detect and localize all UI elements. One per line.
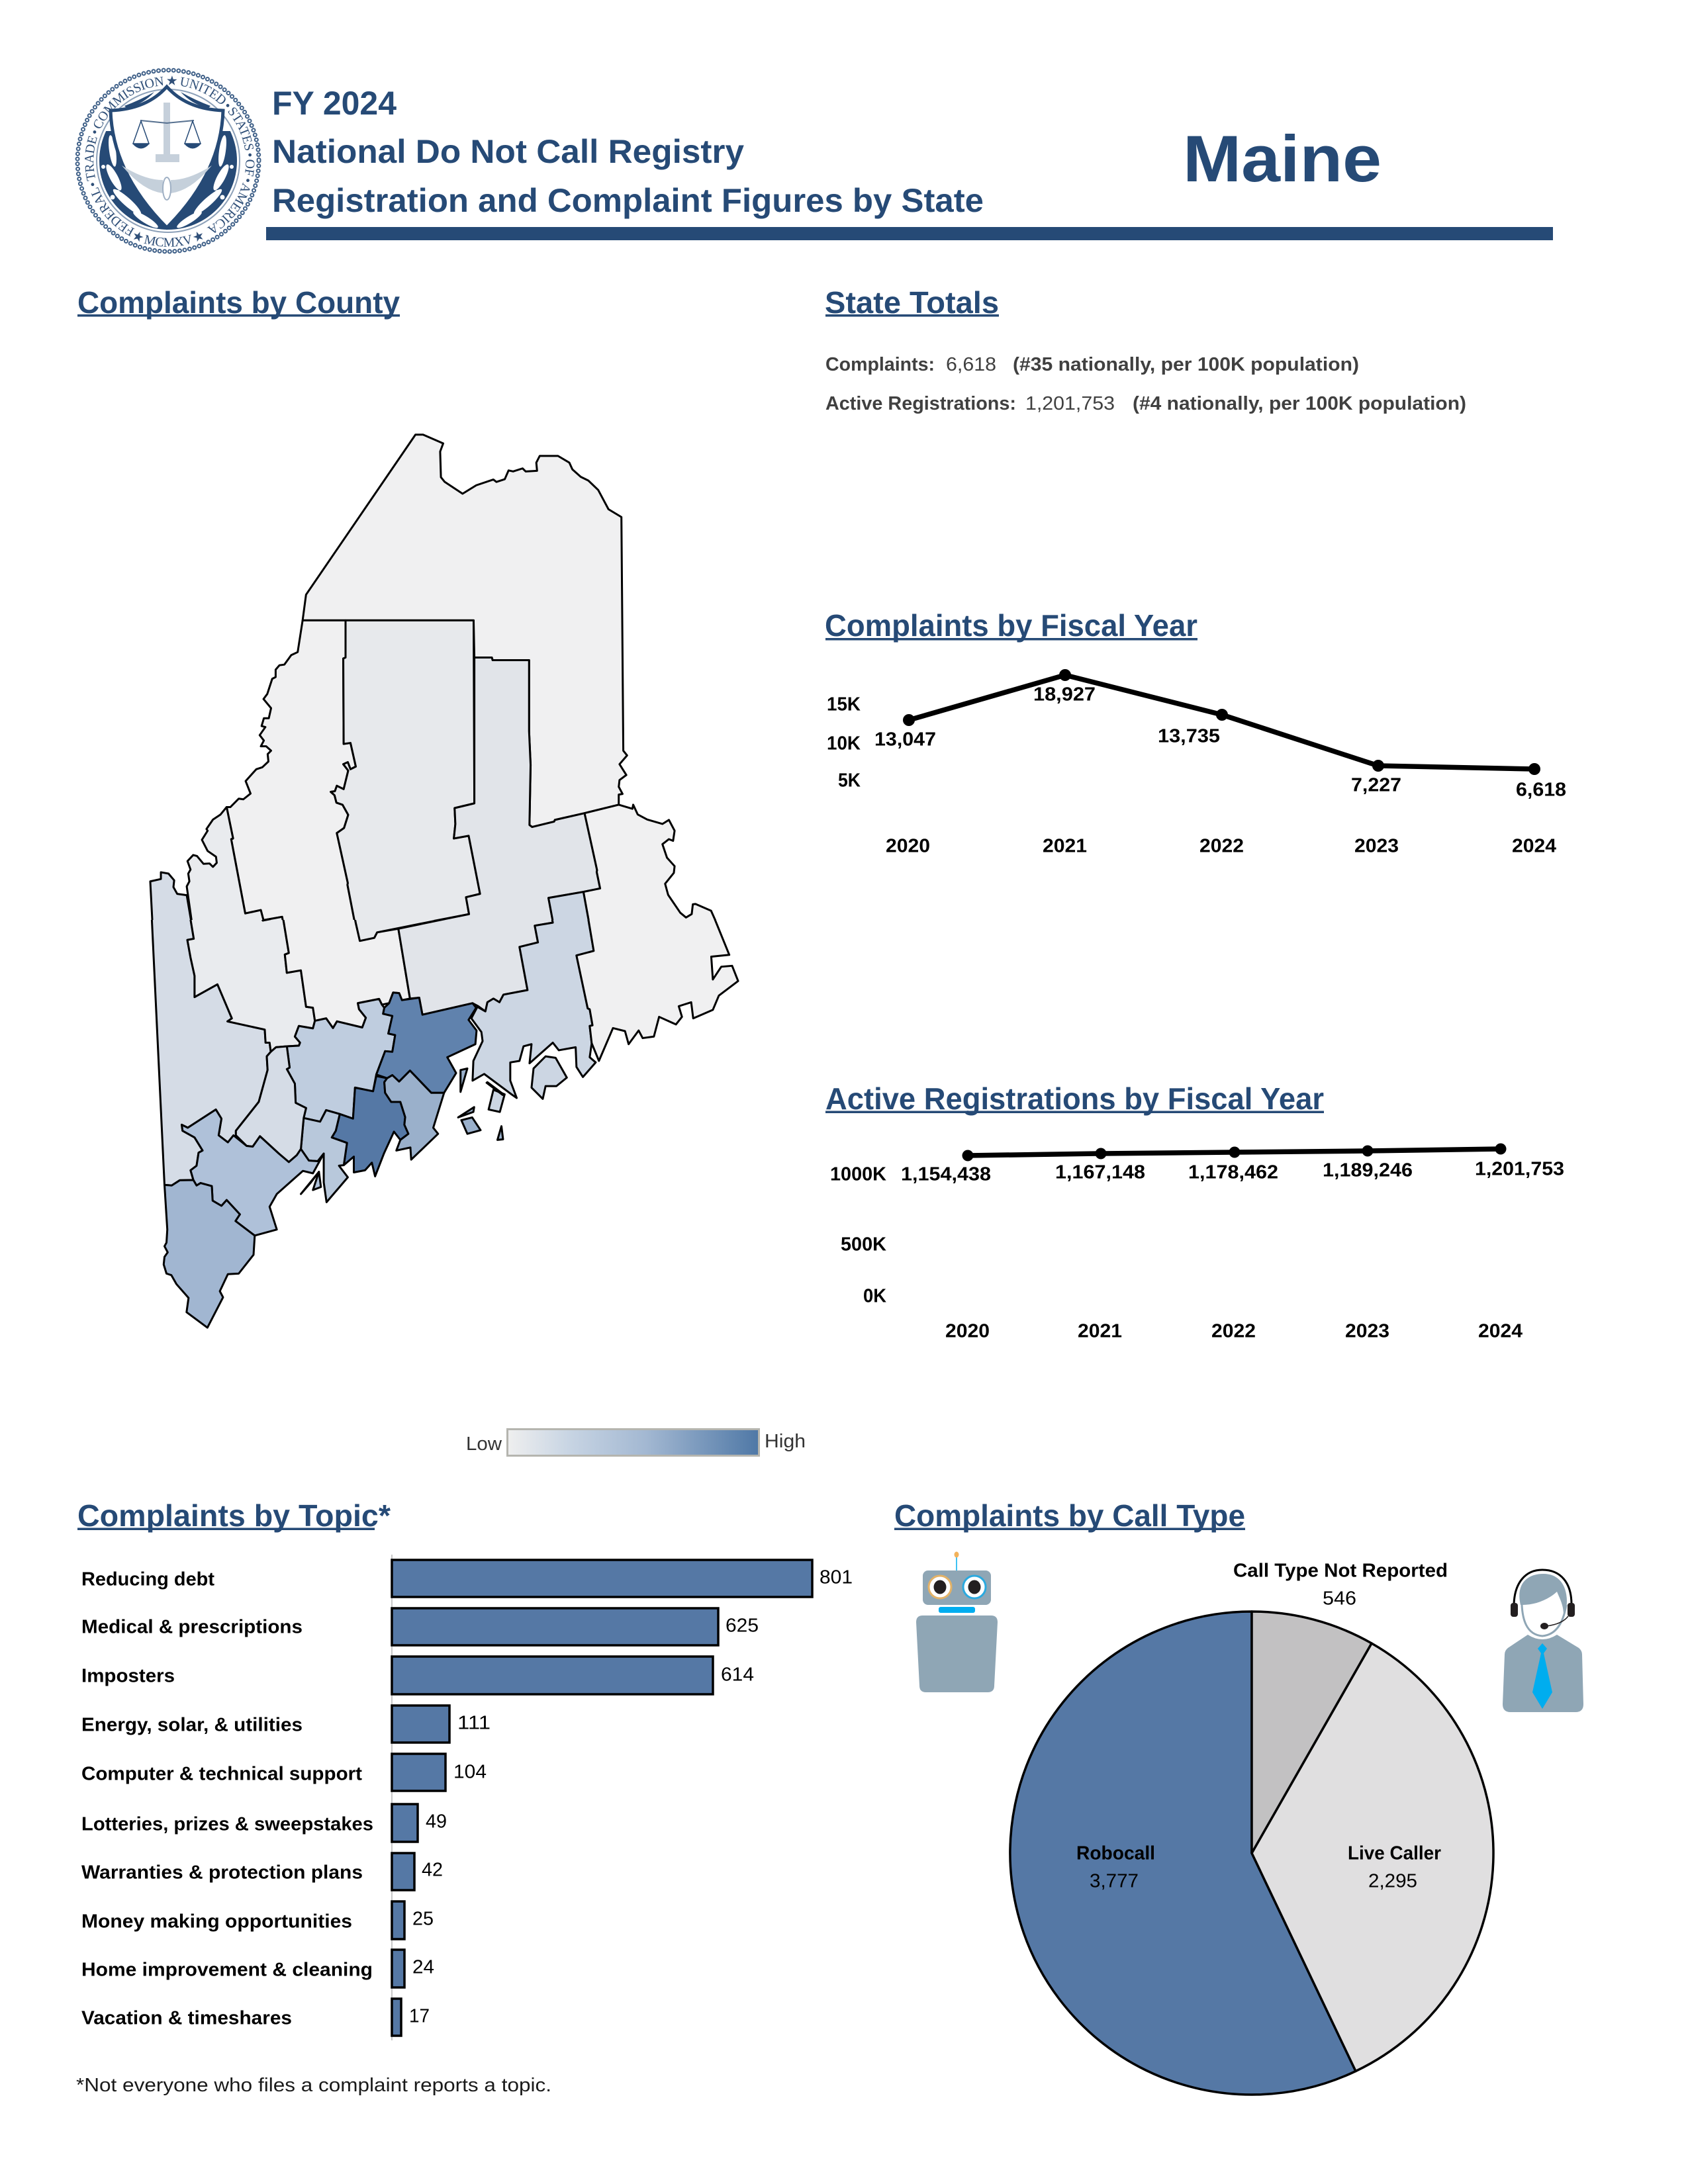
- bar chart: topics: Vacation & timeshares: [81, 2008, 292, 2029]
- heading: active registrations by fiscal year: Active Registrations by Fiscal Year: [825, 1081, 1324, 1116]
- line chart: complaints: 18,927: [1033, 684, 1096, 705]
- line chart: complaints: 6,618: [1516, 780, 1566, 801]
- bar chart: topics: [81, 1555, 853, 2040]
- bar chart: topics: Money making opportunities: [81, 1911, 352, 1933]
- pie chart: call types: 2,295: [1368, 1870, 1417, 1891]
- pie chart: call types: 546: [1323, 1588, 1356, 1610]
- line chart: active registrations: 2020: [945, 1321, 990, 1342]
- bar chart: topics: 614: [721, 1664, 754, 1685]
- pie chart: call types: 3,777: [1090, 1870, 1139, 1891]
- panel: complaints by topic: [76, 1498, 853, 2096]
- map legend: High: [765, 1431, 806, 1452]
- panel: complaints by call type: [894, 1498, 1583, 2095]
- footnote: *Not everyone who files a complaint reports a topic.: [76, 2075, 551, 2096]
- line chart: active registrations: 1,154,438: [901, 1163, 991, 1185]
- text: complaints total: [825, 354, 1359, 375]
- line chart: active registrations: 1000K: [830, 1163, 886, 1185]
- bar chart: topics: Energy, solar, & utilities: [81, 1714, 303, 1735]
- text: active registrations total: Active Registrations:: [825, 393, 1016, 414]
- text: active registrations total: [825, 393, 1466, 414]
- line chart: active registrations: 2022: [1211, 1321, 1256, 1342]
- bar chart: topics: Warranties & protection plans: [81, 1862, 363, 1884]
- line chart: active registrations: 2024: [1478, 1321, 1523, 1342]
- county map of Maine: [150, 435, 738, 1328]
- line chart: active registrations: 500K: [841, 1234, 886, 1255]
- bar chart: topics: 49: [426, 1811, 447, 1832]
- line chart: complaints: 2021: [1043, 835, 1087, 856]
- bar chart: topics: Lotteries, prizes & sweepstakes: [81, 1813, 373, 1835]
- panel: active registrations by fiscal year: [825, 1081, 1564, 1342]
- bar chart: topics: 625: [726, 1615, 759, 1636]
- line chart: active registrations: 0K: [863, 1285, 886, 1306]
- pie chart: call types: Robocall: [1076, 1843, 1155, 1864]
- heading: complaints by county: Complaints by County: [77, 285, 400, 320]
- line chart: active registrations: 1,189,246: [1323, 1160, 1413, 1181]
- line chart: active registrations: 1,178,462: [1188, 1162, 1278, 1183]
- map legend: [466, 1430, 806, 1456]
- bar chart: topics: 801: [820, 1567, 853, 1588]
- panel: complaints by county: [77, 285, 806, 1456]
- line chart: complaints: 10K: [827, 733, 861, 754]
- bar chart: topics: Home improvement & cleaning: [81, 1959, 373, 1980]
- map legend: Low: [466, 1433, 502, 1455]
- bar chart: topics: Reducing debt: [81, 1569, 214, 1590]
- bar chart: topics: 42: [422, 1860, 443, 1881]
- bar chart: topics: Medical & prescriptions: [81, 1616, 303, 1637]
- bar chart: topics: 111: [457, 1713, 491, 1734]
- panel: complaints by fiscal year: [825, 608, 1566, 856]
- logo: FTC seal: ★ MCMXV ★: [134, 232, 203, 247]
- title lines: National Do Not Call Registry: [272, 133, 744, 170]
- header rule: [266, 227, 1553, 240]
- line chart: active registrations: 1,201,753: [1475, 1158, 1564, 1179]
- line chart: complaints: 13,047: [874, 729, 936, 751]
- logo: FTC seal: FEDERAL • TRADE • COMMISSION ★ UNITED • STATES • OF • AMERICA: [85, 75, 254, 237]
- line chart: complaints: 2020: [886, 835, 930, 856]
- bar chart: topics: 25: [412, 1909, 434, 1930]
- text: complaints total: Complaints:: [825, 354, 935, 375]
- heading: complaints by fiscal year: Complaints by Fiscal Year: [825, 608, 1197, 643]
- heading: complaints by call type: Complaints by Call Type: [894, 1498, 1245, 1533]
- line chart: complaints: 7,227: [1351, 774, 1401, 796]
- heading: complaints by topic: Complaints by Topic*: [77, 1498, 391, 1533]
- heading: state totals: State Totals: [825, 285, 999, 320]
- title lines: Registration and Complaint Figures by State: [272, 182, 984, 219]
- text: complaints total: (#35 nationally, per 100K population): [1013, 354, 1359, 375]
- bar chart: topics: 24: [412, 1956, 434, 1978]
- line chart: complaints: 2024: [1512, 835, 1556, 856]
- pie chart: call types: Call Type Not Reported: [1233, 1561, 1448, 1582]
- bar chart: topics: Imposters: [81, 1665, 175, 1686]
- pie chart: call types: Live Caller: [1348, 1843, 1441, 1864]
- bar chart: topics: 17: [409, 2005, 430, 2026]
- title lines: FY 2024: [272, 85, 397, 122]
- icon: live caller with headset: [1503, 1570, 1583, 1712]
- line chart: active registrations: [830, 1144, 1564, 1342]
- line chart: active registrations: 1,167,148: [1055, 1162, 1145, 1183]
- text: active registrations total: 1,201,753: [1025, 393, 1115, 414]
- bar chart: topics: 104: [453, 1762, 487, 1783]
- line chart: complaints: 5K: [838, 770, 861, 792]
- line chart: complaints: 2022: [1199, 835, 1244, 856]
- icon: robot: [916, 1551, 998, 1692]
- title lines: [272, 85, 984, 219]
- line chart: complaints: 13,735: [1158, 725, 1220, 747]
- bar chart: topics: Computer & technical support: [81, 1763, 362, 1784]
- line chart: complaints: [827, 669, 1566, 856]
- text: active registrations total: (#4 nationally, per 100K population): [1133, 393, 1466, 414]
- line chart: complaints: 2023: [1354, 835, 1399, 856]
- pie chart: call types: [1010, 1561, 1493, 2095]
- panel: state totals: [825, 285, 1466, 414]
- state name: Maine: [1183, 122, 1382, 195]
- line chart: complaints: 15K: [827, 694, 861, 715]
- header: [75, 68, 1553, 254]
- text: complaints total: 6,618: [946, 354, 996, 375]
- line chart: active registrations: 2021: [1078, 1321, 1122, 1342]
- line chart: active registrations: 2023: [1345, 1321, 1389, 1342]
